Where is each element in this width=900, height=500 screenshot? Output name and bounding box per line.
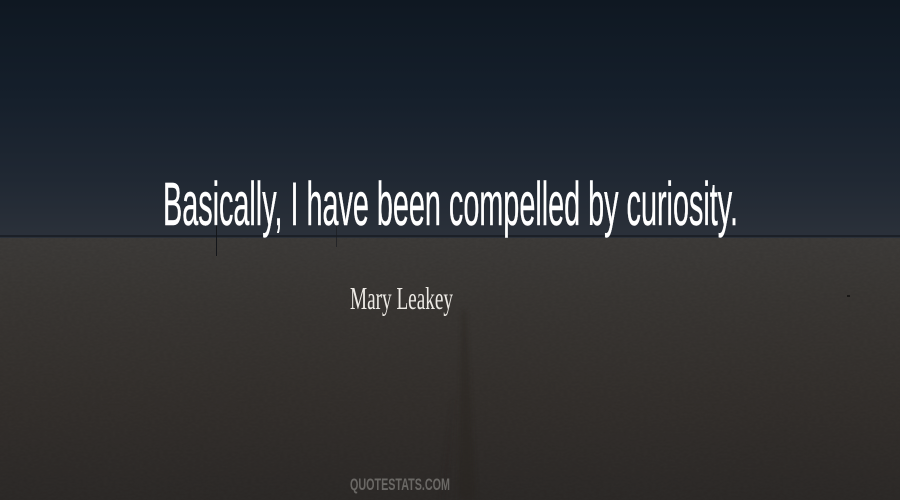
road tracks [440,310,476,500]
horizon line and poles [0,225,900,297]
source watermark: QUOTESTATS.COM [350,475,450,494]
ground grain texture [0,238,900,500]
sky [0,0,900,238]
author name: Mary Leakey [350,280,453,316]
ground [0,238,900,500]
